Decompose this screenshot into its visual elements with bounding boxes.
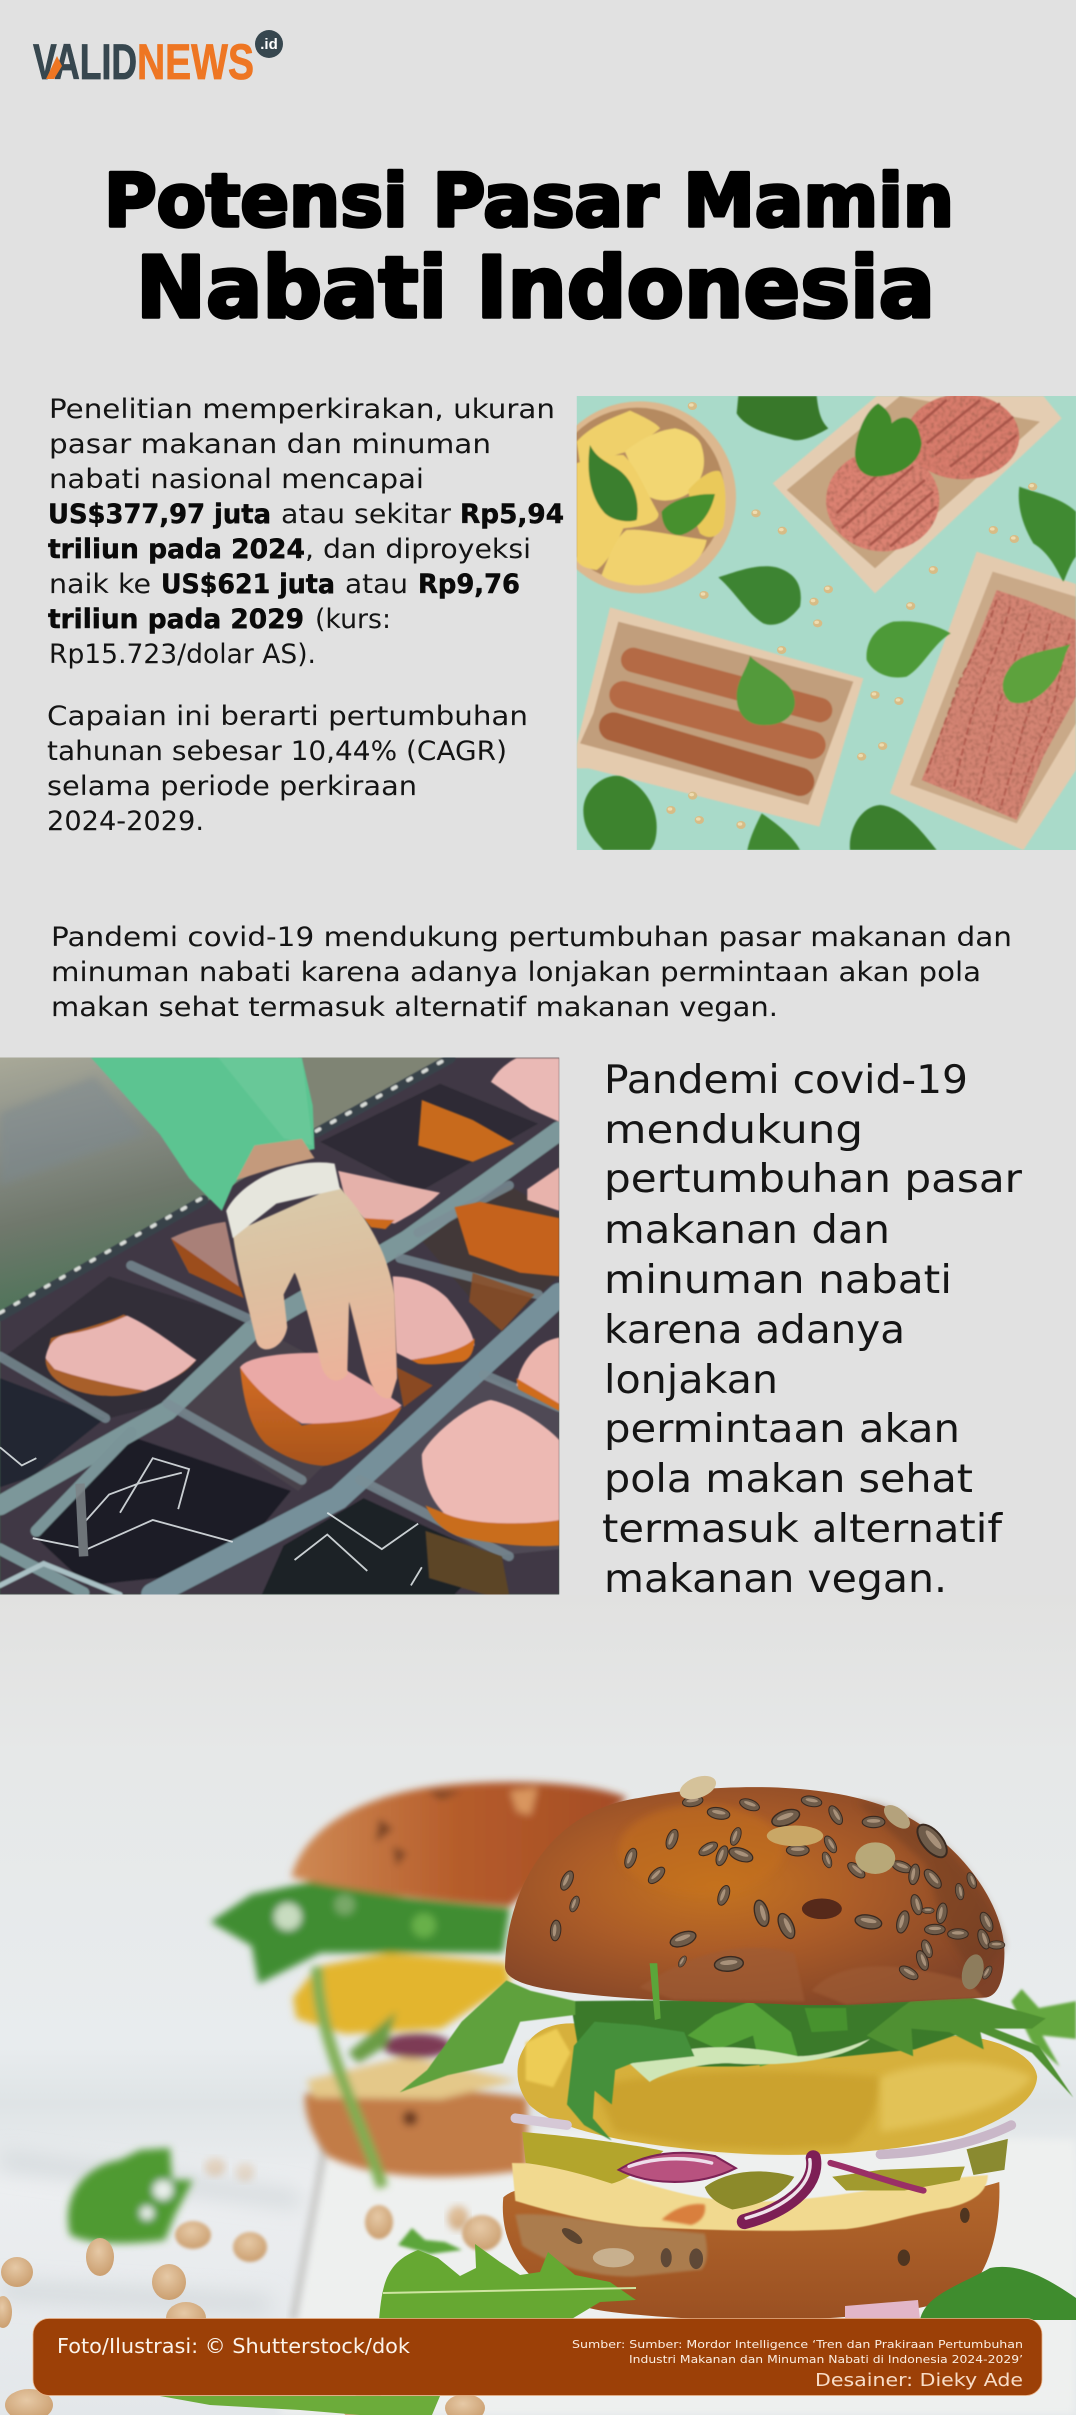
tray: burger patties xyxy=(773,394,1062,593)
seeds xyxy=(550,1771,1005,1992)
red onion piece xyxy=(845,2300,920,2320)
text block: pandemic callout: termasuk alternatif xyxy=(602,1507,1003,1552)
arugula leaf foreground left xyxy=(379,2244,636,2320)
text block: pandemic callout: pola makan sehat xyxy=(604,1457,973,1502)
text block: pandemic summary xyxy=(51,922,1012,1023)
text block: pandemic summary: Pandemi covid-19 mendukung pertumbuhan pasar makanan dan xyxy=(51,922,1012,953)
footer bar xyxy=(33,2318,1042,2396)
icon: soybeans xyxy=(666,402,1037,829)
text block: market size: Rp15.723/dolar AS). xyxy=(49,639,316,670)
source: Sumber: Sumber: Mordor Intelligence ‘Tren dan Prakiraan Pertumbuhan xyxy=(572,2338,1023,2351)
text block: market size: (kurs: xyxy=(315,604,391,635)
icon: bowl of nuggets xyxy=(576,400,737,594)
text block: CAGR xyxy=(47,701,528,837)
chickpeas xyxy=(0,2158,502,2415)
text block: pandemic callout: lonjakan xyxy=(604,1358,778,1403)
text block: pandemic callout: mendukung xyxy=(604,1108,863,1153)
logo: Validnews.id: .id xyxy=(260,36,278,53)
text block: market size: atau xyxy=(345,569,408,600)
onion xyxy=(515,2118,1011,2222)
text block: market size: naik ke xyxy=(49,569,151,600)
hand with green sleeve xyxy=(91,1057,397,1398)
hummus xyxy=(512,2163,988,2231)
title: Nabati Indonesia xyxy=(136,239,935,338)
designer credit: Desainer: Dieky Ade xyxy=(815,2370,1023,2391)
top bun xyxy=(505,1787,1004,2005)
text block: pandemic callout: pertumbuhan pasar xyxy=(604,1157,1023,1202)
logo: Validnews.id xyxy=(33,30,283,90)
plastic wrinkles xyxy=(0,1447,422,1585)
text block: CAGR: selama periode perkiraan xyxy=(47,771,417,802)
photo: veggie burgers xyxy=(0,1776,1076,2415)
text block: market size: triliun pada 2029 xyxy=(48,604,304,635)
text block: CAGR: 2024-2029. xyxy=(47,806,204,837)
text block: CAGR: Capaian ini berarti pertumbuhan xyxy=(47,701,528,732)
text block: pandemic summary: minuman nabati karena adanya lonjakan permintaan akan pola xyxy=(51,957,981,988)
logo: Validnews.id: VALID xyxy=(33,34,137,90)
back burger xyxy=(210,1782,627,2187)
text block: market size: Rp9,76 xyxy=(418,569,520,600)
source xyxy=(572,2338,1023,2366)
text block: market size: nabati nasional mencapai xyxy=(49,464,424,495)
logo: Validnews.id: NEWS xyxy=(137,34,254,90)
text block: market size: Rp5,94 xyxy=(460,499,564,530)
text block: market size: triliun pada 2024 xyxy=(48,534,305,565)
patty xyxy=(517,2023,1037,2155)
text block: market size: atau sekitar xyxy=(281,499,452,530)
arugula leaf foreground right xyxy=(920,2267,1076,2320)
text block: pandemic callout: permintaan akan xyxy=(604,1407,960,1452)
trays xyxy=(0,1056,559,1595)
title: Potensi Pasar Mamin xyxy=(104,159,954,244)
left blurred leaf xyxy=(68,2148,193,2243)
icon: loose spinach leaves xyxy=(583,396,1076,850)
green leaf under footer xyxy=(160,2396,440,2415)
photo: gloved hand and meat trays xyxy=(0,1056,559,1596)
text block: pandemic callout: Pandemi covid-19 xyxy=(604,1058,968,1103)
text block: pandemic callout: makanan vegan. xyxy=(604,1557,947,1602)
title xyxy=(104,159,954,338)
photo: plant-based food trays xyxy=(544,394,1076,850)
tray: minced meat xyxy=(890,552,1076,850)
text block: pandemic callout: karena adanya xyxy=(604,1308,905,1353)
text block: market size: Penelitian memperkirakan, ukuran xyxy=(49,394,555,425)
text block: pandemic callout: makanan dan xyxy=(604,1208,890,1253)
main burger xyxy=(400,1771,1076,2320)
text block: pandemic callout xyxy=(602,1058,1023,1602)
text block: CAGR: tahunan sebesar 10,44% (CAGR) xyxy=(47,736,507,767)
arugula xyxy=(400,1980,1073,2141)
text block: pandemic callout: minuman nabati xyxy=(604,1258,952,1303)
photo credit: Foto/Ilustrasi: © Shutterstock/dok xyxy=(57,2334,410,2358)
table and board xyxy=(0,2130,1076,2415)
text block: market size: US$377,97 juta xyxy=(48,499,271,530)
tray: sausages xyxy=(577,607,863,827)
meat slices xyxy=(45,1058,559,1596)
small mid leaf xyxy=(398,2228,462,2254)
text block: market size: US$621 juta xyxy=(161,569,335,600)
right background leaf xyxy=(1011,1989,1076,2067)
bottom bun xyxy=(503,2182,999,2320)
text block: market size: pasar makanan dan minuman xyxy=(49,429,491,460)
pickles xyxy=(522,2132,663,2184)
text block: pandemic summary: makan sehat termasuk alternatif makanan vegan. xyxy=(51,992,778,1023)
source: Industri Makanan dan Minuman Nabati di Indonesia 2024-2029’ xyxy=(629,2353,1023,2366)
text block: market size: , dan diproyeksi xyxy=(305,534,531,565)
text block: market size xyxy=(48,394,564,670)
